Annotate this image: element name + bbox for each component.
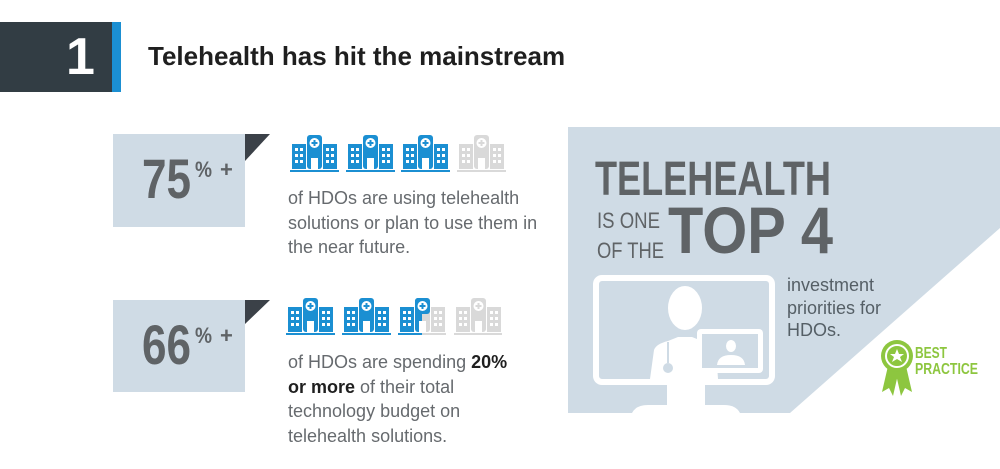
subheading: is one of the: IS ONE xyxy=(597,208,660,233)
stat box 66%: % xyxy=(195,323,212,348)
icons row 2: 2.5 of 4 buildings xyxy=(286,298,502,335)
text: investment priorities xyxy=(787,275,881,340)
header number box xyxy=(0,22,121,92)
text: stat 2: of HDOs are spending 20% or more of their total technology budget on telehealth solutions. xyxy=(288,352,507,446)
text: investment priorities: priorities for xyxy=(787,298,881,318)
text: investment priorities: HDOs. xyxy=(787,320,841,340)
stat box 66%: + xyxy=(220,323,233,348)
text: stat 1: of HDOs are using telehealth solutions or plan to use them in the near future. xyxy=(288,188,537,257)
icon: best practice badge xyxy=(881,340,978,396)
stat box 75%: 75 xyxy=(142,147,191,210)
panel: telehealth top 4 xyxy=(568,127,1000,413)
heading: TELEHEALTH: TELEHEALTH xyxy=(595,153,831,206)
icons row 1: 3 of 4 buildings xyxy=(290,135,506,172)
stat box 75%: % xyxy=(195,157,212,182)
icon: doctor on monitor xyxy=(596,278,772,413)
stat box 75%: + xyxy=(220,157,233,182)
subheading: is one of the xyxy=(597,208,664,263)
text: investment priorities: investment xyxy=(787,275,874,295)
subheading: is one of the: OF THE xyxy=(597,238,664,263)
icon: best practice badge: BEST xyxy=(915,345,947,362)
icon: best practice badge: PRACTICE xyxy=(915,361,978,378)
heading: TELEHEALTH xyxy=(595,153,833,267)
header number box: 1 xyxy=(66,28,95,86)
stat box 66%: 66 xyxy=(142,313,191,376)
heading: TELEHEALTH: TOP 4 xyxy=(668,193,833,267)
stat box 75% xyxy=(113,134,270,227)
title: Telehealth has hit the mainstream xyxy=(148,41,565,71)
stat box 66% xyxy=(113,300,270,392)
